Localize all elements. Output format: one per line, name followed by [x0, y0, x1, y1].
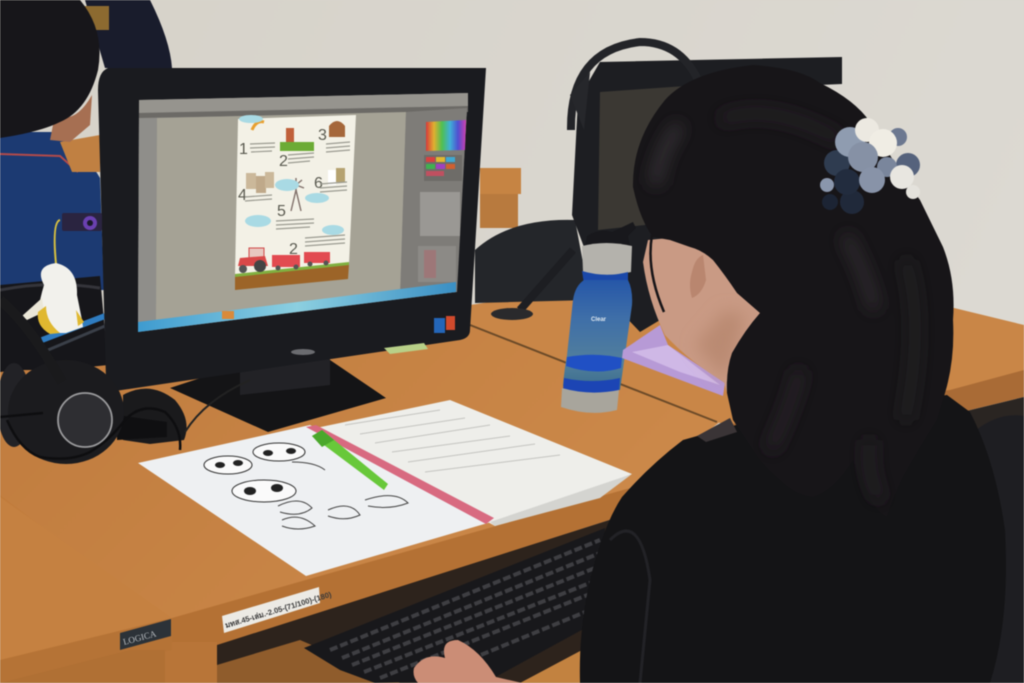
cable arm and desk grommet [491, 250, 573, 320]
application menu bar [139, 93, 468, 113]
taskbar [138, 282, 456, 332]
steel collar [582, 243, 632, 275]
sacks [246, 172, 274, 193]
headphones [0, 300, 250, 464]
ear [690, 255, 706, 298]
step numbers: 5 [277, 203, 286, 220]
handwritten text lines [345, 410, 560, 472]
step numbers: 4 [238, 187, 247, 204]
step numbers: 2 [289, 241, 298, 258]
open workbook [138, 400, 632, 576]
screen [138, 93, 468, 332]
red tractor and trailers [238, 248, 330, 273]
steel base [561, 388, 619, 413]
panel: front left desk [0, 497, 172, 683]
ear cup plate [58, 393, 112, 447]
barn [329, 121, 345, 137]
tool strip [138, 118, 157, 322]
panel: main wooden desk [0, 325, 720, 683]
windmill [288, 178, 304, 211]
USB drive with lanyard [55, 213, 102, 264]
far ear pad [123, 389, 187, 444]
main monitor [98, 68, 486, 391]
sticker badges on bezel [434, 316, 455, 333]
right side panels [400, 108, 467, 298]
farmer on grass [280, 128, 314, 151]
right chair back [976, 415, 1024, 683]
brand label: LOGICA: LOGICA [122, 628, 158, 647]
brand logo on bezel [291, 349, 315, 355]
panda sketch: top row [204, 443, 325, 474]
panel: rear monitor with headphones [475, 42, 842, 332]
keyboard [304, 528, 605, 683]
dark chair and items behind headphones [0, 276, 108, 372]
artboard area [156, 112, 406, 320]
neck shadow [695, 310, 745, 380]
water band [566, 355, 622, 372]
student in black top [580, 65, 1006, 683]
soil strip [235, 264, 349, 290]
step numbers: 3 [318, 127, 327, 144]
panel: left student in blue shirt [0, 0, 172, 292]
small text lines [245, 142, 350, 246]
student's hand on keyboard [414, 640, 522, 683]
step numbers: 6 [314, 175, 323, 192]
yellow microscope [252, 122, 264, 130]
monitor stand [170, 355, 386, 432]
lower blue band [563, 378, 620, 394]
plush banana toy [22, 263, 84, 334]
bottle logo: Clear [591, 317, 607, 323]
artboard infographic [235, 115, 356, 290]
milk and hay [328, 168, 345, 185]
patterned collar strap [697, 418, 737, 442]
clouds [239, 115, 344, 235]
near ear pad [0, 363, 31, 447]
body [563, 280, 632, 390]
headband [0, 300, 62, 382]
panda sketch: lower row [232, 480, 408, 529]
pom-pom scrunchie [820, 118, 920, 214]
step numbers: 2 [279, 153, 288, 170]
face and neck [643, 235, 790, 440]
green highlighter [312, 430, 388, 490]
cable [0, 408, 180, 459]
blue neck [582, 271, 628, 284]
sideburn strand [650, 235, 664, 312]
blue water bottle [561, 222, 636, 413]
purple paper on back desk [622, 325, 725, 396]
hair [633, 65, 954, 517]
sweater [580, 395, 1006, 683]
brand label: LOGICA [120, 619, 171, 650]
asset sticker: มทส.45-เล่ม.-2.05-(71/100)-(180) [224, 590, 333, 630]
spout and cap [585, 222, 636, 247]
panel: far back desk at the right [470, 168, 1024, 440]
step numbers [238, 127, 327, 258]
small green note on desk [384, 343, 428, 354]
hair highlights [655, 113, 915, 500]
ribbed stalk [117, 415, 167, 440]
step numbers: 1 [239, 141, 248, 158]
